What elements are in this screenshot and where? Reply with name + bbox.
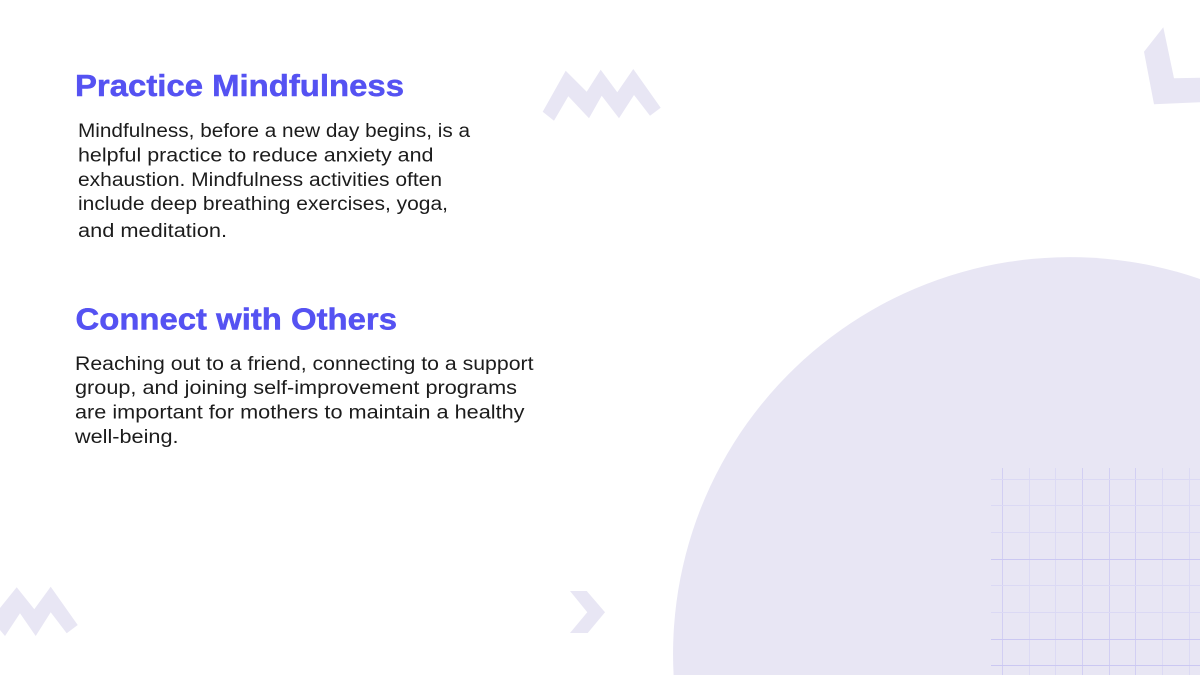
text block: connection description: group, and joining self-improvement programs bbox=[75, 378, 517, 399]
grid pattern bbox=[991, 468, 1200, 675]
heading: Connect with Others: Connect with Others bbox=[76, 302, 397, 336]
text block: mindfulness description: Mindfulness, before a new day begins, is a bbox=[78, 121, 470, 142]
text block: connection description: Reaching out to a friend, connecting to a support bbox=[75, 354, 534, 375]
chevron shape bbox=[570, 591, 605, 633]
text block: mindfulness description: exhaustion. Mindfulness activities often bbox=[78, 170, 442, 191]
text block: connection description: are important for mothers to maintain a healthy bbox=[75, 402, 525, 424]
heading: Practice Mindfulness: Practice Mindfulness bbox=[75, 68, 404, 103]
text block: connection description: well-being. bbox=[74, 427, 178, 448]
text block: mindfulness description: helpful practice to reduce anxiety and bbox=[78, 146, 434, 166]
text block: mindfulness description: and meditation. bbox=[78, 221, 227, 242]
text block: connection description bbox=[74, 354, 534, 448]
text block: mindfulness description: include deep breathing exercises, yoga, bbox=[78, 194, 448, 215]
zigzag shape: bottom left bbox=[0, 587, 78, 636]
text block: mindfulness description bbox=[78, 121, 470, 242]
zigzag shape: top centre bbox=[543, 69, 661, 121]
background circle bbox=[673, 257, 1200, 675]
corner shape: top right bbox=[1144, 27, 1200, 104]
